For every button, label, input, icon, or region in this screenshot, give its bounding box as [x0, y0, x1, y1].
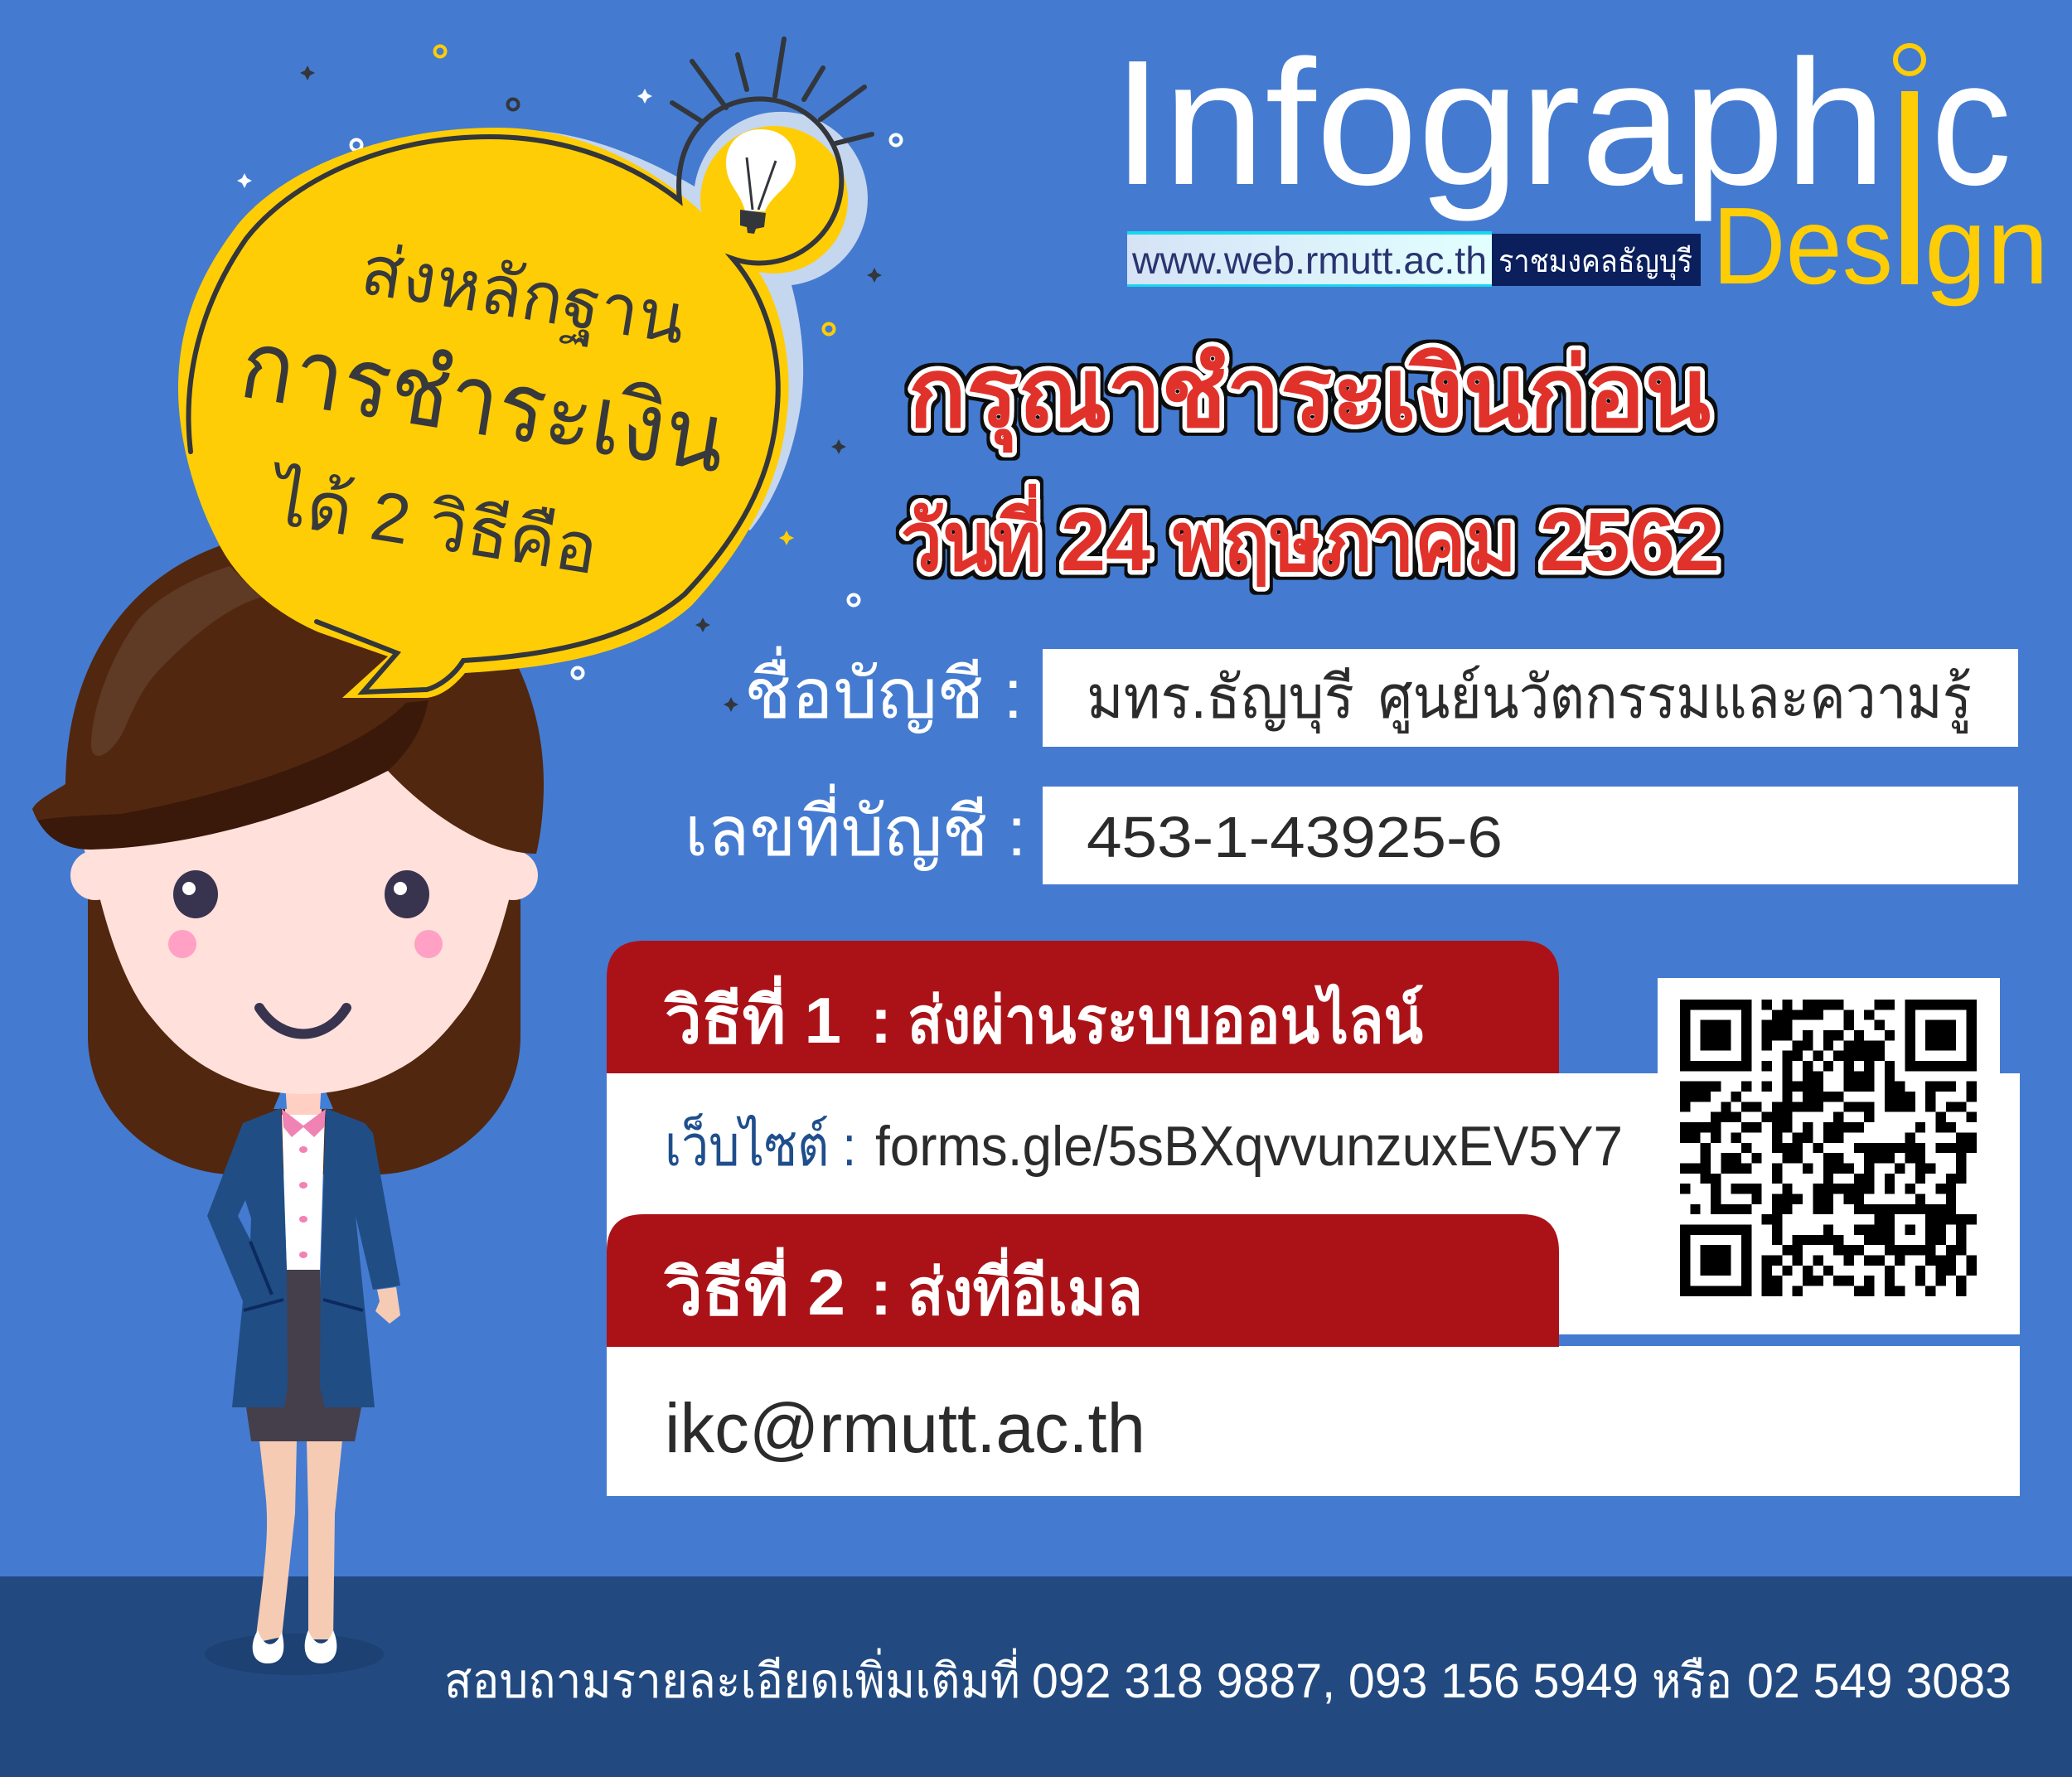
- blazer: [207, 1108, 400, 1407]
- rays: [672, 39, 872, 143]
- bubble yellow fill: [178, 128, 789, 698]
- bubble line 2: การชำระเงิน: [234, 310, 733, 493]
- tab text: วิธีที่ 2: [664, 1247, 845, 1329]
- eyes: [173, 870, 429, 918]
- web badge: www.web.rmutt.ac.th: [1131, 239, 1487, 282]
- footer contact text: สอบถามรายละเอียดเพิ่มเติมที่: [444, 1648, 1020, 1708]
- top hair: [65, 530, 544, 854]
- tab text: วิธีที่ 1: [664, 975, 841, 1057]
- footer contact text: [444, 1648, 2011, 1708]
- hair highlight: [91, 566, 261, 756]
- decorative sparkles: [237, 46, 902, 712]
- blazer pockets: [244, 1242, 363, 1310]
- bulb glass: [726, 129, 796, 211]
- smile: [259, 1008, 346, 1034]
- title: Infographic Design: [1112, 22, 2049, 307]
- shoes: [253, 1630, 336, 1663]
- email: ikc@rmutt.ac.th: [665, 1389, 1145, 1467]
- account name label: ชื่อบัญชี :: [744, 646, 1023, 734]
- tab text: [664, 975, 1424, 1057]
- shirt buttons: [299, 1146, 307, 1258]
- method 1 panel: [607, 941, 2020, 1334]
- deadline heading: กรุณาชำระเงินก่อน: [908, 339, 1711, 453]
- bulb yellow disc: [700, 126, 848, 274]
- final c: c: [1931, 22, 2011, 222]
- account name box: [1043, 649, 2018, 747]
- web badge: [1127, 231, 1701, 287]
- account number label: เลขที่บัญชี :: [685, 783, 1026, 872]
- Des: Des: [1712, 185, 1893, 307]
- legs: [255, 1440, 342, 1643]
- Infograph: Infograph: [1112, 22, 1886, 222]
- deadline date: วันที่: [901, 483, 1042, 588]
- website label: เว็บไซต์ :: [665, 1113, 856, 1178]
- method 2 panel: [607, 1214, 2020, 1496]
- web badge: ราชมงคลธัญบุรี: [1498, 245, 1692, 280]
- tab: [607, 1214, 1559, 1347]
- panel body: [607, 1346, 2020, 1496]
- fringe shadow: [32, 700, 428, 850]
- deadline date: พฤษภาคม: [1173, 496, 1517, 588]
- tab text: :: [870, 984, 892, 1057]
- tab text: :: [870, 1256, 892, 1329]
- tab text: ส่งผ่านระบบออนไลน์: [908, 983, 1424, 1057]
- bubble line 1: ส่งหลักฐาน: [356, 230, 691, 361]
- yellow letter i: [1895, 46, 1924, 284]
- bubble back shadow: [514, 112, 868, 530]
- neck: [285, 1077, 322, 1129]
- account number box: 453-1-43925-6: [1087, 805, 1503, 869]
- character: woman in blue blazer: [32, 530, 544, 1675]
- collar: [274, 1082, 333, 1109]
- footer contact text: 092 318 9887, 093 156 5949: [1032, 1654, 1639, 1708]
- account name box: ศูนย์นวัตกรรมและความรู้: [1378, 665, 1972, 734]
- panel body: [607, 1073, 2020, 1334]
- deadline date: 24: [1061, 496, 1150, 588]
- bulb base: [740, 210, 766, 234]
- footer band: [0, 1576, 2072, 1777]
- bubble outline: [189, 99, 841, 692]
- tab text: ส่งที่อีเมล: [908, 1247, 1143, 1329]
- cheeks: [168, 930, 443, 958]
- deadline date: 2562: [1540, 496, 1720, 588]
- shirt: [282, 1115, 325, 1270]
- speech bubble with light bulb: [178, 39, 872, 698]
- footer contact text: 02 549 3083: [1747, 1654, 2011, 1708]
- website url: forms.gle/5sBXqvvunzuxEV5Y7: [875, 1115, 1623, 1178]
- ground shadow: [205, 1634, 384, 1675]
- QR code: [1658, 978, 2000, 1334]
- fringe: [32, 597, 406, 821]
- bubble line 3: ได้ 2 วิธีคือ: [262, 460, 603, 588]
- filaments: [747, 157, 776, 210]
- tab: [607, 941, 1559, 1073]
- deadline date: [901, 483, 1720, 588]
- account name box: มทร.ธัญบุรี: [1087, 665, 1354, 734]
- ears: [70, 850, 538, 900]
- tab text: [664, 1247, 1143, 1329]
- bow collar: [282, 1109, 326, 1137]
- footer contact text: หรือ: [1652, 1654, 1732, 1708]
- back hair: [88, 796, 520, 1174]
- hand: [375, 1287, 400, 1324]
- face: [83, 746, 530, 1094]
- account number box: [1043, 787, 2018, 884]
- skirt: [246, 1268, 361, 1441]
- gn: gn: [1924, 185, 2049, 307]
